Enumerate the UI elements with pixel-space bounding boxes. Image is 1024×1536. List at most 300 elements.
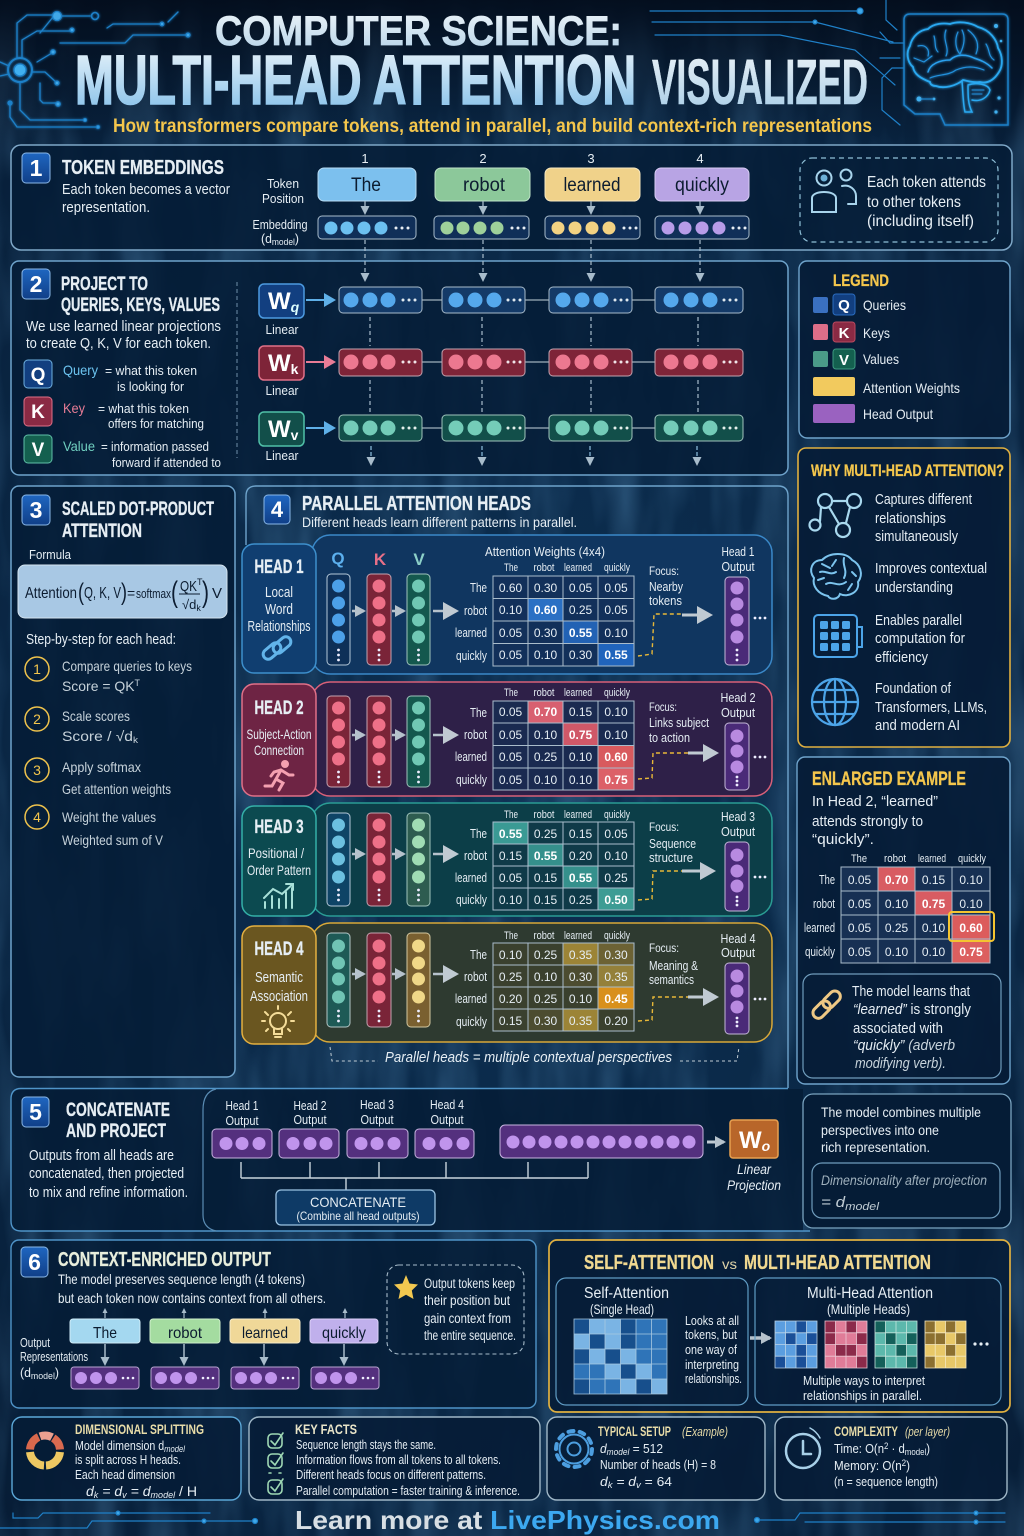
attention matrix head 2: learned <box>564 687 592 699</box>
heading: project <box>61 274 220 316</box>
definition: query: is looking for <box>117 379 185 394</box>
position numbers: 2 <box>479 151 487 166</box>
attention matrix head 4: 0.20 <box>604 1014 628 1028</box>
parallel heads caption: Parallel heads = multiple contextual perspectives <box>385 1049 672 1066</box>
attention matrix head 3: 0.15 <box>534 871 558 885</box>
description: representation. <box>62 199 150 216</box>
panel 3: scaled dot-product attention <box>11 486 235 1077</box>
legend: values: Values <box>863 351 899 367</box>
footer: learn more: Learn more at LivePhysics.com <box>295 1505 720 1535</box>
step 3: 3 <box>33 762 41 778</box>
enlarged description <box>812 793 938 848</box>
focus note head 2: Focus: <box>649 700 677 714</box>
formula box: k <box>196 603 201 613</box>
self-attention heatmap <box>574 1319 667 1394</box>
reason 3 <box>814 612 965 666</box>
formula box: T <box>197 577 203 587</box>
dimensionality box: Dimensionality after projection <box>821 1172 987 1188</box>
attention matrix head 4: quickly <box>604 930 630 942</box>
dimensionality box <box>812 1163 1000 1218</box>
reason 1: simultaneously <box>875 528 958 545</box>
head 1 tab: Word <box>265 601 293 618</box>
definition: query: Q <box>31 365 45 386</box>
step 1: Score = QK <box>62 678 135 694</box>
self-attention box: Looks at all <box>685 1314 739 1328</box>
self-attention box: (Single Head) <box>590 1301 654 1317</box>
output label: ) <box>55 1366 59 1380</box>
legend: values: V <box>839 352 849 369</box>
card: dimensional splitting: k <box>94 1490 99 1500</box>
panel 5: concatenate and project <box>11 1088 1011 1231</box>
attention matrix head 4: 0.30 <box>604 948 628 962</box>
token: quickly <box>655 168 749 201</box>
enlarged matrix: 0.60 <box>959 921 983 935</box>
step 1: Compare queries to keys <box>62 658 192 674</box>
value vectors <box>339 415 743 441</box>
focus arrow head 4 <box>638 997 715 1021</box>
focus arrow head 3 <box>638 871 712 900</box>
attention matrix head 3: 0.55 <box>569 871 593 885</box>
arrow self to multi <box>750 1336 770 1340</box>
head output labels: Head 4 <box>430 1097 464 1112</box>
attention matrix head 2: 0.05 <box>499 773 523 787</box>
icon: gear <box>556 1431 592 1467</box>
card: key facts: Sequence length stays the same. <box>296 1438 436 1452</box>
attention matrix head 4: 0.10 <box>499 948 523 962</box>
position and embedding labels: ) <box>295 231 299 246</box>
head 4 tab <box>242 926 316 1044</box>
attention matrix head 4: 0.25 <box>534 992 558 1006</box>
step 2 <box>25 707 139 745</box>
badge 3: 3 <box>30 497 42 523</box>
attention matrix head 2: 0.75 <box>569 728 593 742</box>
card: complexity: ) <box>926 1441 930 1456</box>
title line 2: VISUALIZED <box>652 46 868 118</box>
enlarged heading: ENLARGED EXAMPLE <box>812 769 966 790</box>
formula box: ( <box>171 576 178 609</box>
attention matrix head 2: 0.10 <box>569 750 593 764</box>
output label <box>20 1336 88 1381</box>
card: complexity <box>775 1417 1007 1500</box>
attention matrix head 1: 0.10 <box>534 648 558 662</box>
badge 4: 4 <box>271 497 284 522</box>
token: learned <box>545 168 640 201</box>
attention matrix head 1: The <box>470 580 487 595</box>
callout: model learns: The model learns that <box>852 983 971 1000</box>
card: key facts: Different heads focus on different patterns. <box>296 1468 486 1482</box>
Wo projection: Projection <box>727 1177 781 1193</box>
panel: why multi-head attention <box>798 448 1010 747</box>
arrows <box>352 973 455 975</box>
output vectors <box>71 1367 379 1389</box>
heading: concatenate: AND PROJECT <box>66 1121 166 1142</box>
legend: keys: Keys <box>863 325 890 341</box>
attention matrix head 3: 0.25 <box>569 893 593 907</box>
badge 6: 6 <box>28 1249 41 1275</box>
attention matrix head 1 <box>455 544 634 666</box>
position and embedding labels <box>252 176 308 247</box>
enlarged matrix: robot <box>813 896 835 911</box>
step 2: Scale scores <box>62 708 130 724</box>
description: but each token now contains context from all others. <box>58 1290 326 1306</box>
card: typical setup: model <box>607 1447 630 1457</box>
head output vectors <box>212 1129 474 1158</box>
head 1 tab: Local <box>265 584 293 601</box>
token: The: The <box>351 175 381 196</box>
attention matrix head 3: 0.10 <box>604 849 628 863</box>
QKV labels: V <box>413 550 425 569</box>
head 3 tab: Order Pattern <box>247 862 311 878</box>
callout: model learns: associated with <box>853 1020 943 1037</box>
attention matrix head 4: 0.35 <box>604 970 628 984</box>
mini heatmap gold <box>925 1321 966 1368</box>
concatenate box: (Combine all head outputs) <box>296 1209 420 1223</box>
card: complexity: 2 <box>902 1458 906 1468</box>
enlarged matrix: 0.15 <box>922 873 946 887</box>
card: dimensional splitting: Each head dimension <box>75 1468 175 1482</box>
attention matrix head 1: 0.30 <box>569 648 593 662</box>
head 3 output: Output <box>721 824 755 839</box>
legend: keys: K <box>839 325 850 342</box>
Wk projection: W <box>268 350 291 377</box>
reason 3: computation for <box>875 630 965 647</box>
output label: model <box>31 1371 55 1381</box>
focus note head 1: Focus: <box>649 564 679 578</box>
token: robot <box>435 168 530 201</box>
callout: output tokens keep position <box>387 1265 524 1354</box>
attention matrix head 3: The <box>504 809 518 821</box>
heading: token embeddings: TOKEN EMBEDDINGS <box>62 157 224 179</box>
attention matrix head 4: 0.25 <box>534 948 558 962</box>
step 4: Weight the values <box>62 809 156 825</box>
card: dimensional splitting <box>12 1417 241 1500</box>
token: robot: robot <box>463 175 506 196</box>
focus note head 1: Nearby <box>649 579 683 594</box>
icon: brain in circuit frame <box>904 14 1008 125</box>
position numbers: 3 <box>587 151 595 166</box>
callout: model learns: modifying verb). <box>855 1055 946 1072</box>
attention matrix head 1: robot <box>534 562 554 574</box>
attention matrix head 4: The <box>470 947 487 962</box>
heading: parallel attention heads: PARALLEL ATTENTION HEADS <box>302 493 531 515</box>
description: Each token becomes a vector <box>62 181 230 198</box>
attention matrix head 1: learned <box>455 625 487 640</box>
focus note head 3 <box>649 820 696 865</box>
head 3 output: Head 3 <box>721 809 755 824</box>
step 4: Weighted sum of V <box>62 832 164 848</box>
attention matrix head 3: robot <box>464 848 487 863</box>
card: complexity: (per layer) <box>905 1425 950 1439</box>
attention matrix head 1: 0.55 <box>604 648 628 662</box>
concatenate bracket <box>241 1162 588 1190</box>
badge 1 <box>22 153 50 183</box>
description <box>58 1271 326 1306</box>
arrows down to heads <box>371 446 697 464</box>
focus note head 4: Focus: <box>649 941 679 955</box>
attention matrix head 3: 0.25 <box>604 871 628 885</box>
attention matrix head 2: 0.25 <box>534 750 558 764</box>
attention matrix head 3: 0.50 <box>604 893 628 907</box>
head 1 tab <box>242 544 316 673</box>
self-attention box: tokens, but <box>685 1328 737 1342</box>
step 3 <box>25 758 171 797</box>
attention matrix head 1: 0.30 <box>534 626 558 640</box>
Wq projection: q <box>291 299 300 315</box>
head output labels <box>226 1097 464 1128</box>
description: to mix and refine information. <box>29 1185 188 1201</box>
attention matrix head 1: 0.30 <box>534 581 558 595</box>
badge 4 <box>264 495 290 524</box>
attention matrix head 1: robot <box>464 603 487 618</box>
attention matrix head 2: 0.70 <box>534 705 558 719</box>
enlarged matrix: 0.05 <box>848 921 872 935</box>
badge 6 <box>21 1247 48 1277</box>
formula box: softmax <box>136 586 171 601</box>
enlarged matrix: 0.05 <box>848 873 872 887</box>
panel 2: project to queries, keys, values <box>11 261 788 475</box>
attention matrix head 1: 0.10 <box>499 603 523 617</box>
badge 2: 2 <box>30 271 42 297</box>
card: dimensional splitting: is split across H heads. <box>75 1453 181 1467</box>
formula box: ) <box>121 579 127 606</box>
self-attention box <box>556 1278 748 1405</box>
attention matrix head 4: 0.10 <box>534 970 558 984</box>
attention matrix head 2: 0.05 <box>499 750 523 764</box>
title line 2: MULTI-HEAD ATTENTION <box>75 41 636 119</box>
card: key facts: KEY FACTS <box>295 1422 357 1437</box>
card: typical setup: v <box>636 1480 641 1490</box>
output tokens: robot <box>168 1325 203 1342</box>
head 4 row <box>242 923 772 1044</box>
output tokens: learned <box>242 1325 288 1342</box>
callout: output tokens keep position: Output tokens keep <box>424 1276 515 1291</box>
comparison heading: vs <box>722 1256 737 1272</box>
attention matrix head 1: 0.05 <box>499 648 523 662</box>
card: typical setup: TYPICAL SETUP <box>598 1424 671 1439</box>
position and embedding labels: Embedding <box>252 217 308 232</box>
self-attention box: one way of <box>685 1343 737 1357</box>
attention matrix head 2: robot <box>464 727 487 742</box>
ellipsis <box>973 1342 989 1346</box>
legend: head output <box>813 404 933 423</box>
callout: model learns <box>803 974 1001 1078</box>
concatenated vector <box>500 1125 703 1158</box>
head output labels: Output <box>430 1112 464 1127</box>
reason 1: Captures different <box>875 491 973 508</box>
enlarged matrix: The <box>851 853 867 865</box>
note panel: combines perspectives: The model combines multiple <box>821 1104 981 1120</box>
Wq projection: W <box>268 288 291 315</box>
heading: concatenate <box>66 1100 170 1142</box>
card: typical setup: = 512 <box>629 1441 663 1456</box>
formula box: V <box>212 585 222 602</box>
focus note head 2: to action <box>649 730 690 745</box>
attention matrix head 3: 0.15 <box>569 827 593 841</box>
head 1 tab: HEAD 1 <box>254 557 304 578</box>
card: typical setup: d <box>600 1441 607 1456</box>
heading: concatenate: CONCATENATE <box>66 1100 170 1121</box>
text: each token attends: (including itself) <box>867 213 974 230</box>
icon: clock <box>786 1428 820 1468</box>
card: typical setup: k <box>608 1480 613 1490</box>
head 1 output: Output <box>722 559 755 574</box>
enlarged matrix: 0.25 <box>885 921 909 935</box>
head output labels: Head 2 <box>294 1098 326 1113</box>
card: dimensional splitting: = d <box>127 1483 152 1499</box>
definition: value: Value <box>63 438 95 454</box>
QKV labels: K <box>374 550 387 569</box>
attention matrix head 4: 0.35 <box>569 1014 593 1028</box>
focus note head 2: Links subject <box>649 715 709 730</box>
header circuit decoration right <box>650 0 904 125</box>
head 1 output <box>722 544 766 665</box>
enlarged matrix: 0.10 <box>922 945 946 959</box>
attention matrix head 3 <box>455 809 634 910</box>
mini heatmap teal <box>875 1321 917 1368</box>
callout: output tokens keep position: gain context from <box>424 1311 511 1326</box>
icon: link <box>261 635 293 661</box>
subtitle: How transformers compare tokens, attend in parallel, and build context-rich representations <box>113 116 872 137</box>
icon: people <box>812 170 856 212</box>
panel 1: token embeddings <box>11 145 1012 250</box>
enlarged description: In Head 2, “learned” <box>812 793 938 810</box>
output tokens: quickly <box>322 1325 366 1342</box>
icon: star <box>394 1275 418 1299</box>
attention matrix head 4: 0.15 <box>499 1014 523 1028</box>
footer circuit decoration <box>0 1511 1005 1528</box>
reason 2 <box>811 554 987 599</box>
attention matrix head 3: quickly <box>456 892 487 907</box>
description: Outputs from all heads are <box>29 1148 174 1164</box>
reason 4 <box>812 679 987 734</box>
focus note head 4: Meaning & <box>649 958 698 973</box>
output tokens: The <box>93 1325 117 1342</box>
legend heading: LEGEND <box>833 271 889 290</box>
concatenate box <box>276 1190 435 1225</box>
badge 5 <box>22 1097 49 1127</box>
QKV columns <box>327 574 430 665</box>
step 2: k <box>133 735 139 745</box>
attention matrix head 1: 0.05 <box>604 603 628 617</box>
head 1 output: Head 1 <box>722 544 754 559</box>
enlarged matrix: 0.05 <box>848 897 872 911</box>
step 4: 4 <box>33 809 41 825</box>
card: dimensional splitting: / H <box>175 1483 197 1499</box>
card: dimensional splitting: Model dimension d <box>75 1439 180 1453</box>
attention matrix head 2: 0.60 <box>604 750 628 764</box>
multi-head box: Multi-Head Attention <box>807 1285 933 1302</box>
card: complexity: Memory: O(n <box>834 1458 910 1473</box>
attention matrix head 2: The <box>504 687 518 699</box>
attention matrix head 1: quickly <box>604 562 630 574</box>
concatenate box: CONCATENATE <box>310 1194 406 1210</box>
attention matrix head 2: 0.10 <box>534 773 558 787</box>
note panel: combines perspectives: rich representation. <box>821 1139 930 1155</box>
focus arrow head 2 <box>638 753 715 779</box>
formula box: √d <box>182 597 196 612</box>
attention matrix head 4: 0.10 <box>569 992 593 1006</box>
panel: enlarged example <box>797 757 1010 1084</box>
icon: brain <box>811 554 861 599</box>
card: key facts: Information flows from all tokens to all tokens. <box>296 1453 501 1467</box>
head output labels: Output <box>294 1112 327 1127</box>
comparison heading: SELF-ATTENTION <box>584 1252 714 1274</box>
enlarged matrix: learned <box>918 853 946 865</box>
head 1 row <box>242 535 772 674</box>
token: quickly: quickly <box>675 175 729 196</box>
attention matrix head 1: 0.25 <box>569 603 593 617</box>
enlarged matrix: 0.10 <box>959 873 983 887</box>
arrows token to embedding <box>365 201 700 213</box>
attention matrix head 4: 0.25 <box>499 970 523 984</box>
attention matrix head 4: learned <box>564 930 592 942</box>
definition: value: V <box>32 440 45 461</box>
attention matrix head 1: Attention Weights (4x4) <box>485 544 605 559</box>
token: learned: learned <box>564 175 620 196</box>
attention matrix head 1: 0.60 <box>499 581 523 595</box>
card: complexity: (n = sequence length) <box>834 1474 938 1489</box>
subheading: Different heads learn different patterns in parallel. <box>302 514 577 530</box>
attention matrix head 2: 0.10 <box>534 728 558 742</box>
attention matrix head 2: 0.05 <box>499 705 523 719</box>
icon: running figure <box>265 762 293 790</box>
attention matrix head 2: 0.05 <box>499 728 523 742</box>
card: dimensional splitting: d <box>86 1483 94 1499</box>
attention matrix head 1: 0.60 <box>534 603 558 617</box>
head 2 tab <box>242 684 316 796</box>
header circuit decoration left <box>0 12 190 128</box>
head 3 row <box>242 803 772 916</box>
attention matrix head 3: robot <box>534 809 554 821</box>
self-attention box: interpreting <box>685 1358 739 1372</box>
icon: network <box>810 494 861 537</box>
step 3: Apply softmax <box>62 759 141 775</box>
Wq projection <box>259 284 333 337</box>
head 2 output <box>720 690 766 790</box>
attention matrix head 1: learned <box>564 562 592 574</box>
enlarged matrix: 0.10 <box>922 921 946 935</box>
Wo projection: Linear <box>737 1161 772 1177</box>
attention matrix head 2: quickly <box>604 687 630 699</box>
multi-head box: relationships in parallel. <box>803 1388 922 1403</box>
attention matrix head 4: 0.45 <box>604 992 628 1006</box>
token: The <box>318 168 416 201</box>
arrows <box>352 610 455 612</box>
legend: values <box>813 349 899 369</box>
arrows <box>352 853 455 855</box>
attention matrix head 1: 0.05 <box>569 581 593 595</box>
attention matrix head 4: quickly <box>456 1014 487 1029</box>
Wq projection: Linear <box>266 322 299 337</box>
reason 4: and modern AI <box>875 717 960 734</box>
legend: queries <box>813 294 906 315</box>
attention matrix head 3: 0.55 <box>499 827 523 841</box>
formula box: Q, K, V <box>84 585 121 602</box>
step 3: Get attention weights <box>62 781 171 797</box>
icon: parallel grid <box>814 615 862 657</box>
attention matrix head 3: quickly <box>604 809 630 821</box>
position and embedding labels: Position <box>262 191 304 206</box>
Wk projection: k <box>291 361 299 377</box>
description: to create Q, K, V for each token. <box>26 336 211 352</box>
head output labels: Head 1 <box>226 1098 258 1113</box>
legend: attention weights <box>813 377 960 396</box>
step-by-step heading: Step-by-step for each head: <box>26 632 176 648</box>
formula box: = <box>127 585 135 601</box>
attention matrix head 3: 0.05 <box>499 871 523 885</box>
Wv projection: v <box>291 427 299 443</box>
attention matrix head 3: learned <box>564 809 592 821</box>
